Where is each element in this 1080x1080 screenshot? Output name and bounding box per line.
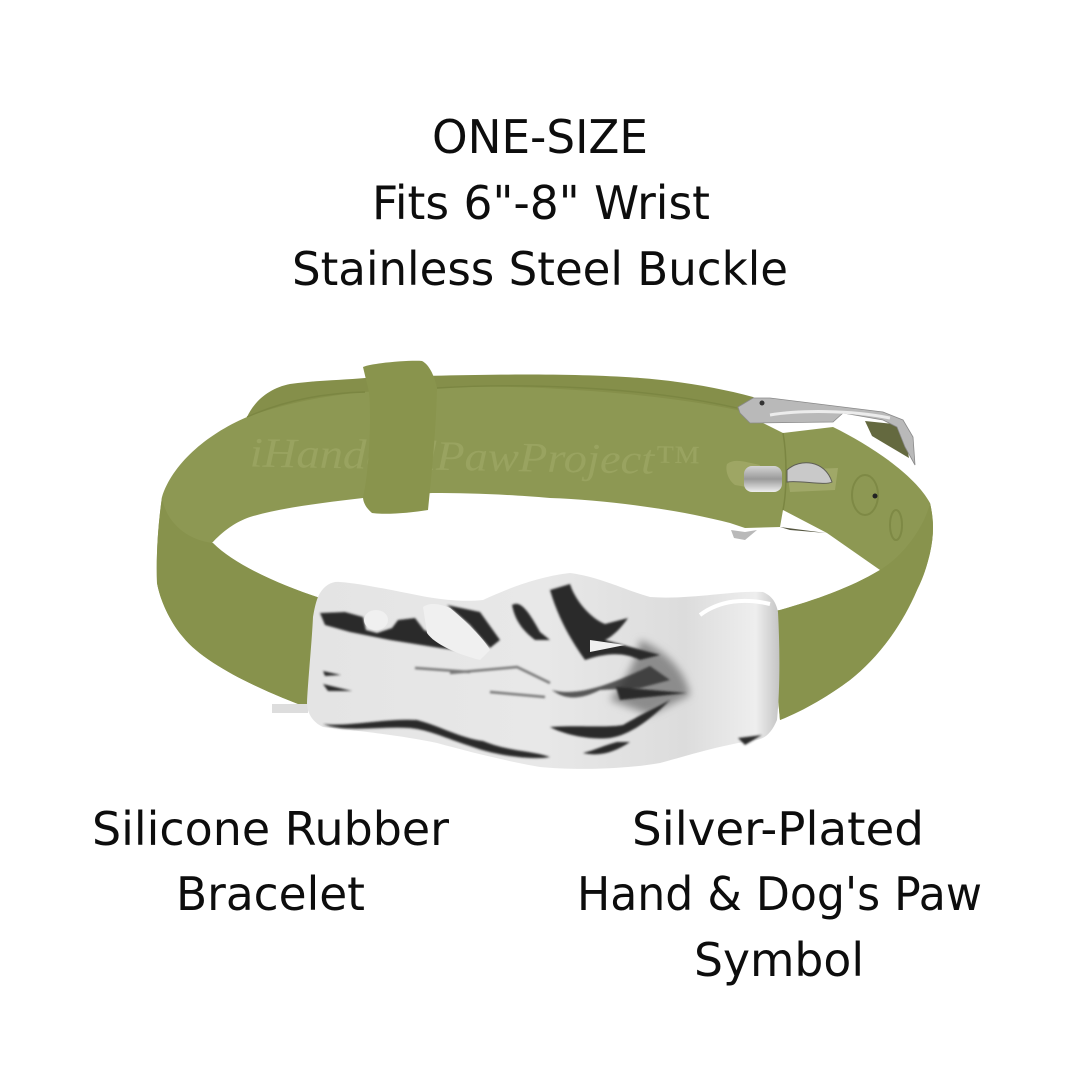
hand shading xyxy=(610,640,690,715)
label: silver-plated symbol: Hand & Dog's Paw xyxy=(577,867,982,921)
label: silicone rubber bracelet: Bracelet xyxy=(176,867,365,921)
heading: product sizing: Stainless Steel Buckle xyxy=(292,242,788,296)
heading: product sizing: Fits 6"-8" Wrist xyxy=(372,176,710,230)
main band xyxy=(157,387,933,720)
metal tip under plate xyxy=(272,704,308,713)
back strap xyxy=(247,375,790,420)
heading: product sizing xyxy=(292,110,788,296)
far side of buckle frame xyxy=(865,421,909,458)
label: silicone rubber bracelet: Silicone Rubber xyxy=(92,802,449,856)
buckle tongue xyxy=(738,398,915,465)
buckle slot and pin xyxy=(726,461,760,488)
label: silicone rubber bracelet xyxy=(92,802,449,921)
band outer face, left xyxy=(157,497,320,708)
light grey streaks xyxy=(415,667,550,697)
buckle lower tab xyxy=(731,530,757,540)
strap holes xyxy=(852,475,902,540)
strap groove xyxy=(247,386,737,417)
label: silver-plated symbol xyxy=(577,802,982,987)
keeper loop xyxy=(363,361,437,514)
band outer face, right xyxy=(770,503,933,720)
buckle hinge line xyxy=(783,433,786,510)
heading: product sizing: ONE-SIZE xyxy=(432,110,648,164)
bracelet photo illustration xyxy=(157,361,933,769)
label: silver-plated symbol: Silver-Plated xyxy=(632,802,924,856)
label: silver-plated symbol: Symbol xyxy=(694,933,864,987)
hand and paw silver plate xyxy=(307,573,779,769)
finger highlights xyxy=(364,604,625,660)
dark engraving xyxy=(320,584,762,758)
top edge shine xyxy=(700,601,770,615)
embossed brand text: iHandandPawProject™ xyxy=(250,431,700,484)
